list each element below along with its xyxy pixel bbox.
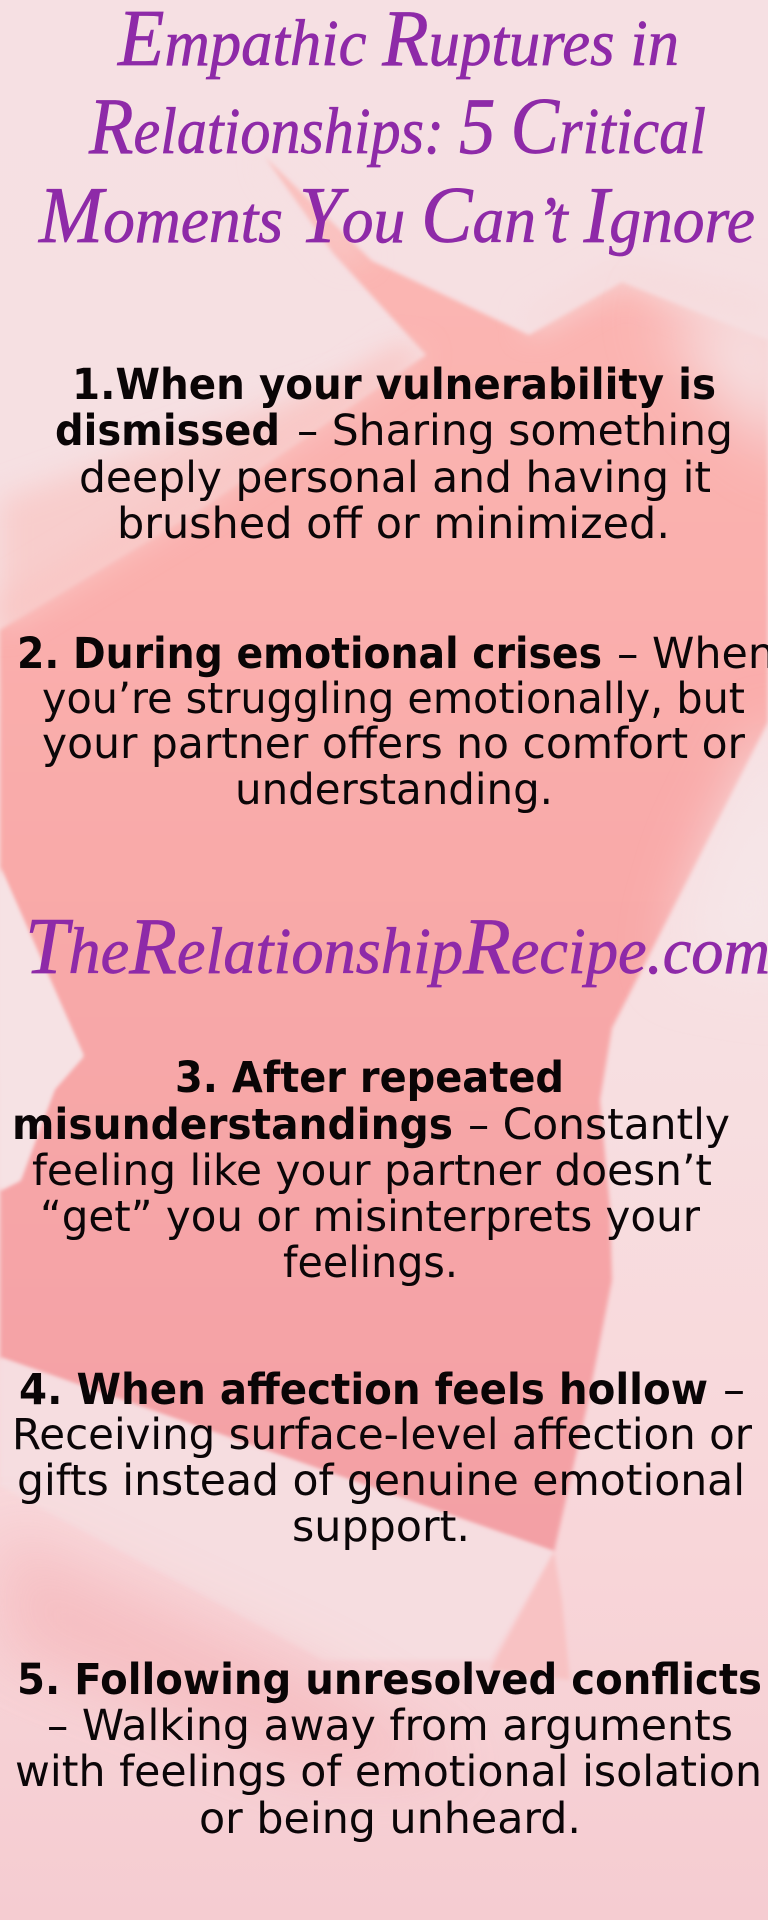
item 3: repeated misunderstandings xyxy=(12,1053,730,1288)
item 3: repeated misunderstandings: “get” you or misinterprets your xyxy=(40,1192,700,1242)
item 5: unresolved conflicts xyxy=(15,1655,762,1844)
item 1: vulnerability dismissed: 1.When your vulnerability is xyxy=(72,360,716,410)
item 4: hollow affection: gifts instead of genuine emotional xyxy=(17,1456,745,1506)
item 2: emotional crises: your partner offers no comfort or xyxy=(42,719,745,769)
item 1: vulnerability dismissed xyxy=(55,360,733,549)
item 2: emotional crises: 2. During emotional crises xyxy=(17,629,602,679)
item 2: emotional crises: understanding. xyxy=(235,765,553,815)
item 1: vulnerability dismissed: dismissed xyxy=(55,406,280,456)
item 3: repeated misunderstandings: – Constantly xyxy=(468,1100,730,1150)
item 4: hollow affection xyxy=(12,1365,752,1552)
title: Moments You Can’t Ignore xyxy=(38,172,755,260)
item 3: repeated misunderstandings: feelings. xyxy=(283,1238,458,1288)
item 1: vulnerability dismissed: brushed off or minimized. xyxy=(117,499,670,549)
item 2: emotional crises xyxy=(17,629,768,815)
item 5: unresolved conflicts: – Walking away from arguments xyxy=(47,1701,733,1751)
item 1: vulnerability dismissed: deeply personal and having it xyxy=(79,453,711,503)
item 3: repeated misunderstandings: 3. After repeated xyxy=(175,1053,564,1103)
item 3: repeated misunderstandings: misunderstandings xyxy=(12,1100,453,1150)
website name: TheRelationshipRecipe.com xyxy=(25,903,768,991)
item 5: unresolved conflicts: with feelings of emotional isolation xyxy=(15,1747,762,1797)
title: Relationships: 5 Critical xyxy=(88,83,706,171)
item 4: hollow affection: 4. When affection feels hollow xyxy=(19,1365,708,1415)
item 2: emotional crises: you’re struggling emotionally, but xyxy=(42,674,745,724)
title xyxy=(38,0,755,260)
item 1: vulnerability dismissed: – Sharing something xyxy=(297,406,733,456)
item 3: repeated misunderstandings: feeling like your partner doesn’t xyxy=(32,1146,712,1196)
item 4: hollow affection: support. xyxy=(292,1502,470,1552)
item 4: hollow affection: – xyxy=(723,1365,745,1415)
item 4: hollow affection: Receiving surface-level affection or xyxy=(12,1410,752,1460)
item 5: unresolved conflicts: or being unheard. xyxy=(199,1794,581,1844)
